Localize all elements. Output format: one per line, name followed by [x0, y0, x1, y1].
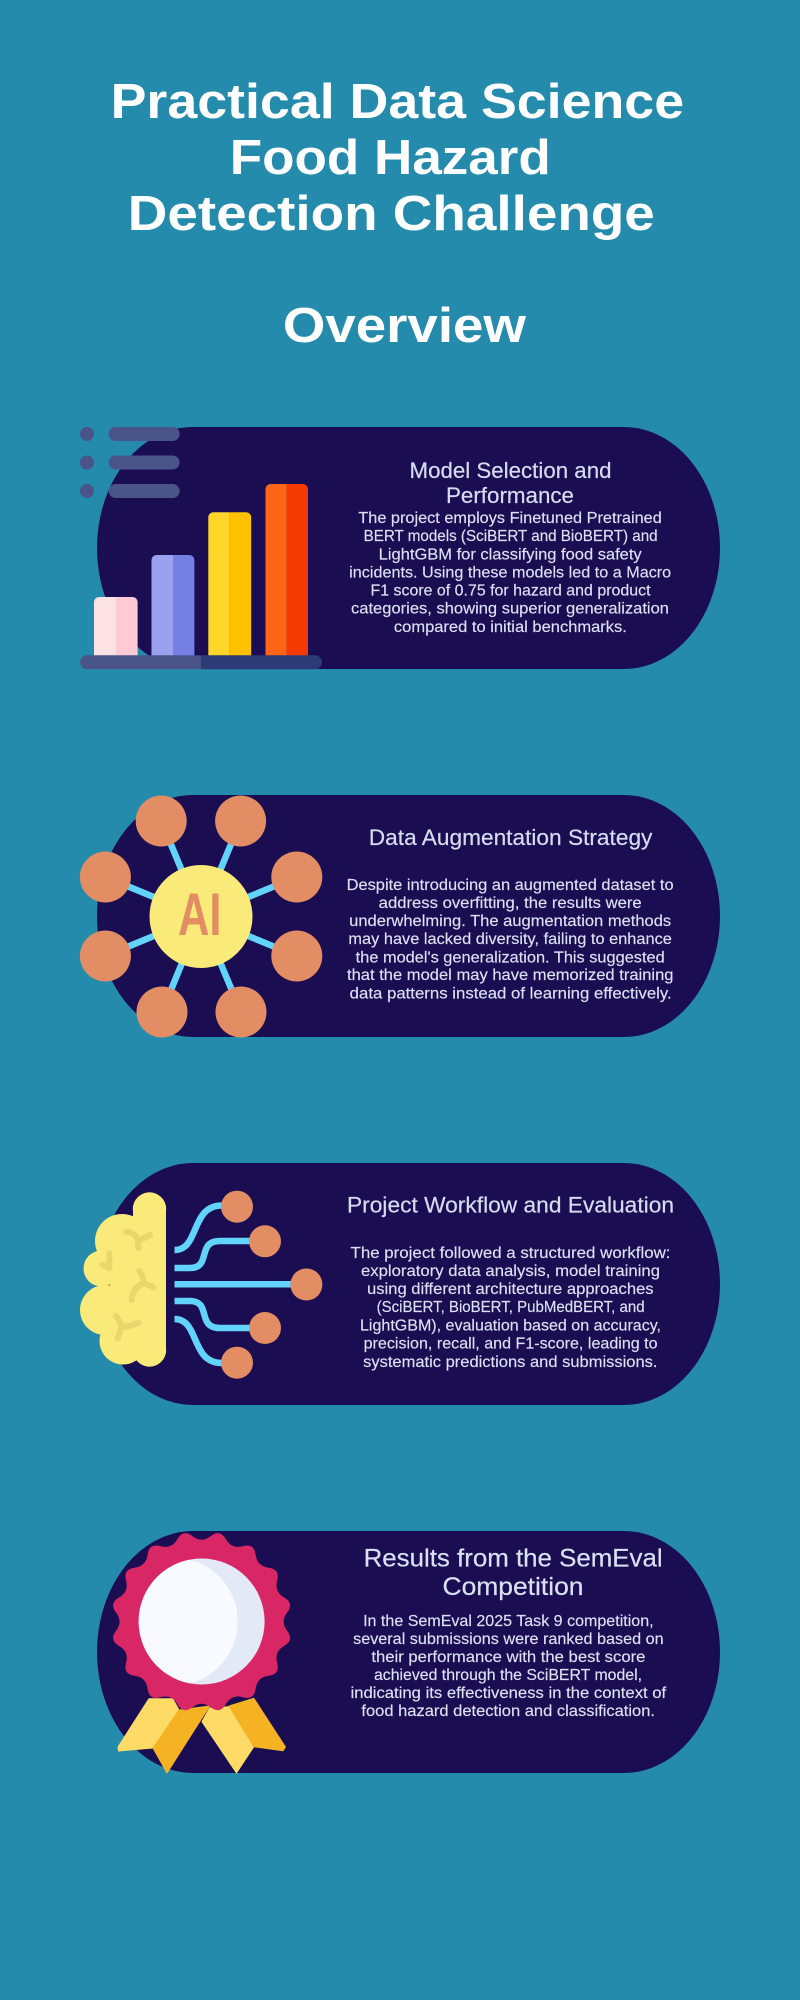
- body text: several submissions were ranked based on: [353, 1631, 664, 1648]
- icon: AI network: AI: [178, 881, 222, 948]
- body text: The project followed a structured workflow:: [350, 1245, 670, 1262]
- body text: food hazard detection and classification.: [361, 1703, 655, 1720]
- heading: Competition: [442, 1573, 584, 1601]
- subtitle: overview: Overview: [283, 299, 527, 353]
- title: Practical Data Science: [111, 75, 684, 129]
- body text: address overfitting, the results were: [379, 895, 642, 912]
- title: Detection Challenge: [128, 187, 655, 241]
- panel: data augmentation strategy: [80, 795, 720, 1038]
- body text: exploratory data analysis, model training: [361, 1263, 660, 1280]
- panel: project workflow and evaluation: [80, 1163, 720, 1405]
- body text: the model's generalization. This suggested: [356, 949, 665, 966]
- body text: LightGBM), evaluation based on accuracy,: [360, 1318, 661, 1334]
- body text: F1 score of 0.75 for hazard and product: [370, 582, 651, 600]
- title: Food Hazard: [230, 131, 551, 185]
- heading: Model Selection and: [410, 458, 612, 483]
- panel background: [97, 427, 720, 669]
- body text: In the SemEval 2025 Task 9 competition,: [363, 1613, 654, 1630]
- heading: Performance: [446, 483, 574, 508]
- body text: that the model may have memorized training: [347, 967, 674, 984]
- body text: The project employs Finetuned Pretrained: [358, 510, 662, 527]
- body text: [350, 1613, 667, 1720]
- icon: award rosette: [113, 1533, 290, 1773]
- body text: using different architecture approaches: [367, 1281, 654, 1298]
- title: [111, 75, 684, 241]
- body text: data patterns instead of learning effectively.: [350, 986, 672, 1003]
- body text: categories, showing superior generalization: [351, 600, 669, 618]
- body text: LightGBM for classifying food safety: [379, 546, 642, 564]
- panel: model selection and performance: [80, 427, 720, 669]
- heading: [364, 1545, 663, 1601]
- body text: compared to initial benchmarks.: [394, 619, 627, 636]
- heading: [410, 458, 612, 508]
- body text: indicating its effectiveness in the context of: [350, 1685, 667, 1702]
- panel background: [97, 1531, 720, 1773]
- body text: [350, 1245, 670, 1371]
- body text: their performance with the best score: [371, 1649, 646, 1666]
- body text: underwhelming. The augmentation methods: [349, 913, 671, 930]
- heading: Data Augmentation Strategy: [369, 825, 653, 850]
- icon: brain with circuit: [80, 1191, 322, 1379]
- body text: achieved through the SciBERT model,: [374, 1667, 642, 1684]
- body text: incidents. Using these models led to a Macro: [349, 564, 671, 582]
- panel background: [97, 1163, 720, 1405]
- panel background: [97, 795, 720, 1037]
- body text: systematic predictions and submissions.: [363, 1354, 658, 1371]
- body text: (SciBERT, BioBERT, PubMedBERT, and: [377, 1299, 645, 1316]
- icon: AI network: [80, 796, 322, 1038]
- body text: BERT models (SciBERT and BioBERT) and: [364, 528, 658, 545]
- body text: precision, recall, and F1-score, leading to: [364, 1336, 658, 1352]
- icon: bar chart: [80, 427, 322, 669]
- body text: [347, 877, 674, 1003]
- panel: results from the semeval competition: [97, 1531, 720, 1773]
- body text: [349, 510, 671, 636]
- heading: Results from the SemEval: [364, 1545, 663, 1573]
- body text: Despite introducing an augmented dataset to: [347, 877, 674, 894]
- heading: Project Workflow and Evaluation: [347, 1193, 674, 1218]
- body text: may have lacked diversity, failing to enhance: [348, 931, 672, 948]
